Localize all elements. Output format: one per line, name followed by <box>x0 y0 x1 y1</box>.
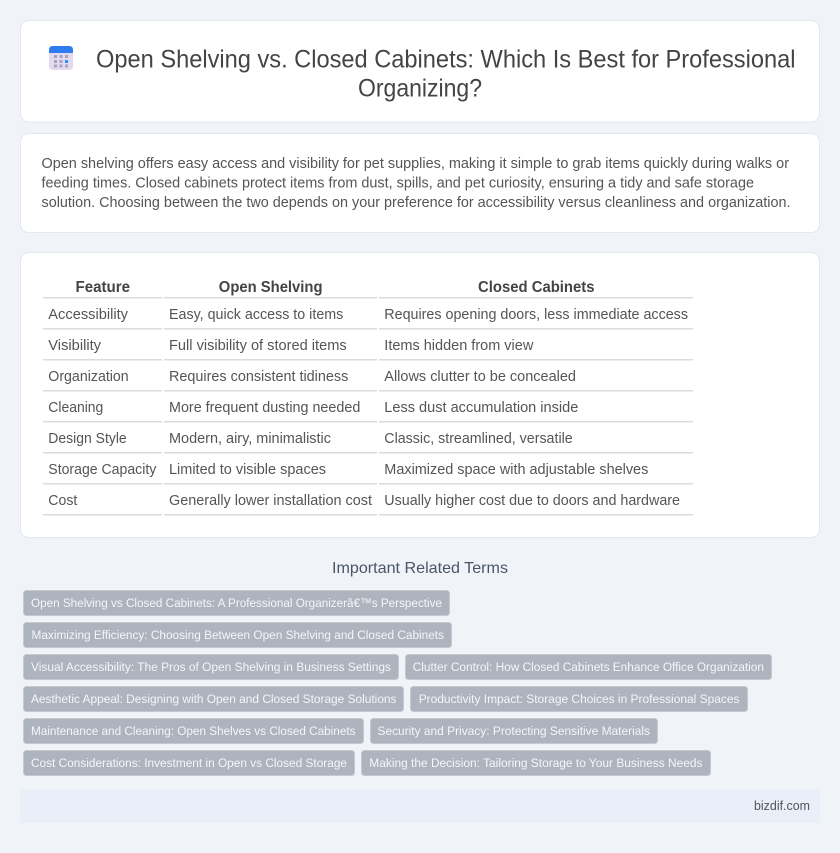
tag 3 <box>24 654 398 680</box>
table header: Open Shelving <box>219 279 322 296</box>
row: cost: Cost <box>48 493 77 509</box>
tag 2: Maximizing Efficiency: Choosing Between Open Shelving and Closed Cabinets <box>32 628 444 642</box>
row: storage capacity: Storage Capacity <box>48 462 157 478</box>
row: cleaning: Cleaning <box>48 400 103 416</box>
panel: title card <box>20 20 820 122</box>
row: organization: Allows clutter to be concealed <box>384 369 576 385</box>
intro paragraph: solution. Choosing between the two depends on your preference for accessibility versus cleanliness and organization. <box>42 195 790 211</box>
tag 9: Cost Considerations: Investment in Open vs Closed Storage <box>31 756 347 770</box>
table header: Feature <box>76 279 130 296</box>
title <box>96 46 796 102</box>
tag 5: Aesthetic Appeal: Designing with Open and Closed Storage Solutions <box>31 692 396 706</box>
tag 5 <box>24 686 404 712</box>
tag 6 <box>410 686 748 712</box>
tag 7 <box>24 718 364 744</box>
tag 4: Clutter Control: How Closed Cabinets Enhance Office Organization <box>413 660 764 674</box>
row: visibility <box>48 338 534 354</box>
row: organization: Requires consistent tidiness <box>169 369 348 385</box>
title: Open Shelving vs. Closed Cabinets: Which Is Best for Professional <box>96 46 796 74</box>
row: design style: Modern, airy, minimalistic <box>169 431 331 447</box>
row: storage capacity <box>48 462 648 478</box>
title: Organizing? <box>358 74 482 102</box>
tag 10: Making the Decision: Tailoring Storage to Your Business Needs <box>369 756 702 770</box>
tag 3: Visual Accessibility: The Pros of Open Shelving in Business Settings <box>31 660 391 674</box>
tag 2 <box>24 622 452 648</box>
row: cost: Usually higher cost due to doors and hardware <box>384 493 680 509</box>
row: cleaning: More frequent dusting needed <box>169 400 360 416</box>
table rules <box>43 297 693 516</box>
row: accessibility: Requires opening doors, less immediate access <box>384 307 688 323</box>
tag 1: Open Shelving vs Closed Cabinets: A Professional Organizerâ€™s Perspective <box>31 596 442 610</box>
row: cost <box>48 493 680 509</box>
footer source text: bizdif.com <box>754 798 810 813</box>
row: organization <box>48 369 576 385</box>
row: cleaning: Less dust accumulation inside <box>384 400 578 416</box>
row: design style: Design Style <box>48 431 127 447</box>
table header <box>76 279 594 296</box>
tag 10 <box>362 750 710 776</box>
intro paragraph: Open shelving offers easy access and visibility for pet supplies, making it simple to grab items quickly during walks or <box>42 156 789 172</box>
tag 8: Security and Privacy: Protecting Sensitive Materials <box>378 724 650 738</box>
row: visibility: Visibility <box>48 338 102 354</box>
row: visibility: Full visibility of stored items <box>169 338 347 354</box>
row: visibility: Items hidden from view <box>384 338 534 354</box>
tag 4 <box>406 654 772 680</box>
row: accessibility <box>48 307 688 323</box>
panel: introduction <box>20 134 820 232</box>
row: cleaning <box>48 400 578 416</box>
row: accessibility: Accessibility <box>48 307 129 323</box>
related terms tags <box>24 590 772 776</box>
tag 1 <box>24 590 450 616</box>
intro paragraph <box>42 156 790 211</box>
tag 7: Maintenance and Cleaning: Open Shelves vs Closed Cabinets <box>31 724 356 738</box>
row: organization: Organization <box>48 369 129 385</box>
row: design style: Classic, streamlined, versatile <box>384 431 573 447</box>
row: accessibility: Easy, quick access to items <box>169 307 343 323</box>
footer <box>20 790 820 823</box>
row: design style <box>48 431 573 447</box>
row: cost: Generally lower installation cost <box>169 493 372 509</box>
row: storage capacity: Maximized space with adjustable shelves <box>384 462 648 478</box>
panel: comparison table <box>20 252 820 538</box>
tag 9 <box>24 750 354 776</box>
intro paragraph: feeding times. Closed cabinets protect items from dust, spills, and pet curiosity, ensuring a tidy and safe storage <box>42 176 754 192</box>
icon: calendar <box>49 46 73 70</box>
tag 8 <box>370 718 658 744</box>
tag 6: Productivity Impact: Storage Choices in Professional Spaces <box>419 692 740 706</box>
row: storage capacity: Limited to visible spaces <box>169 462 326 478</box>
heading: important related terms: Important Related Terms <box>332 560 508 577</box>
table header: Closed Cabinets <box>478 279 594 296</box>
